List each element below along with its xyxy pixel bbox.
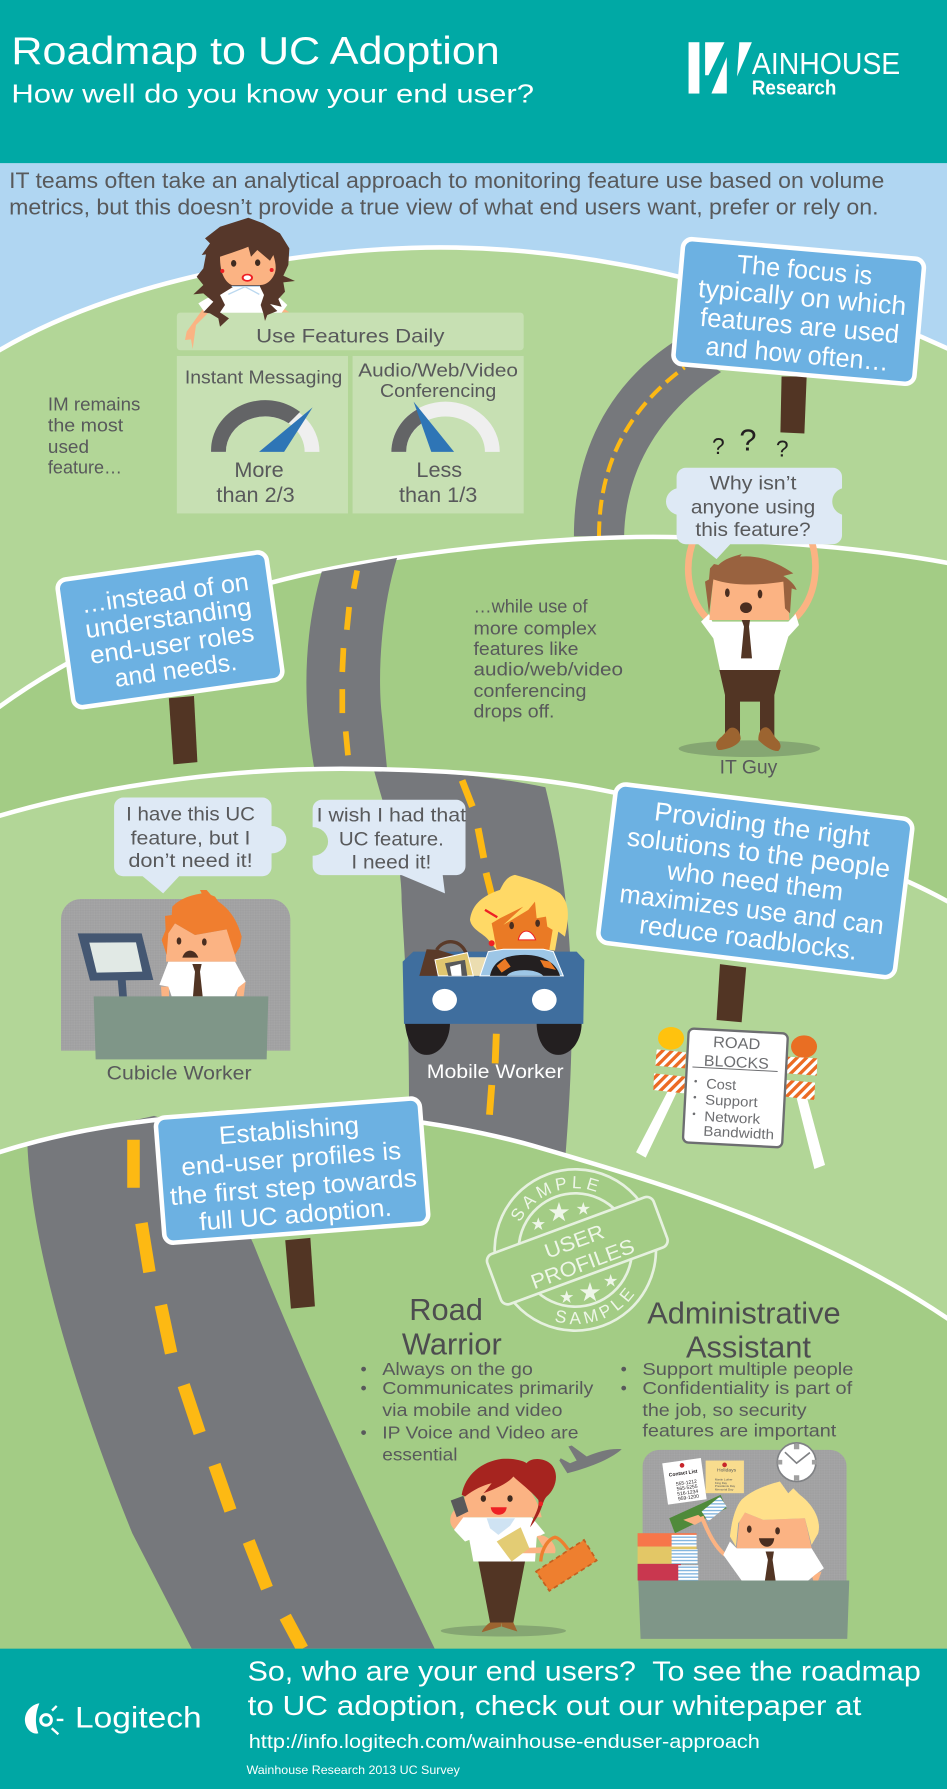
logo: Logitech: Logitech xyxy=(75,1701,202,1734)
speech bubble: have this UC feature: don’t need it! xyxy=(128,850,253,872)
gauge panel: instant messaging xyxy=(177,356,348,513)
bullets: Communicates primarily xyxy=(382,1378,593,1398)
stamp rings and sample text xyxy=(493,1168,658,1332)
monitor xyxy=(78,933,153,998)
heading xyxy=(402,1292,502,1361)
heading bar: Use Features Daily xyxy=(256,325,445,347)
bullets: • xyxy=(361,1359,367,1379)
road blocks sign board: Cost xyxy=(706,1075,737,1093)
headlights xyxy=(432,989,557,1011)
bullets: • xyxy=(621,1378,627,1398)
note: holidays: Holidays xyxy=(717,1468,737,1474)
speech bubble: why isn't anyone using: Why isn’t xyxy=(710,472,797,494)
gauge panel: instant messaging: Instant Messaging xyxy=(185,366,342,387)
heading: Administrative xyxy=(647,1295,841,1330)
subtitle: How well do you know your end user? xyxy=(11,79,534,109)
striped boards xyxy=(653,1049,817,1100)
heading: Warrior xyxy=(402,1326,502,1361)
question marks: ? xyxy=(776,435,789,461)
sign: focus on features: The focus is xyxy=(736,249,874,291)
intro text: metrics, but this doesn’t provide a true view of what end users want, prefer or rely on. xyxy=(9,194,879,219)
icon: airplane xyxy=(559,1446,622,1473)
text: while use of complex features drops off: …while use of xyxy=(474,596,589,617)
gauge panel: conferencing: Less xyxy=(416,457,462,482)
profile: administrative assistant xyxy=(621,1295,854,1440)
post: end-user roles sign xyxy=(169,696,197,764)
road blocks sign board: Network xyxy=(704,1108,762,1127)
profile: road warrior xyxy=(361,1292,593,1464)
speech bubble: why isn't anyone using: anyone using xyxy=(691,496,815,518)
road: third segment xyxy=(374,771,572,1164)
sign: right solutions: reduce roadblocks. xyxy=(638,909,859,966)
text: while use of complex features drops off: more complex xyxy=(474,617,597,638)
road blocks sign board: Support xyxy=(705,1091,758,1110)
speech bubble: why isn't anyone using: this feature? xyxy=(695,519,811,541)
speech bubble: have this UC feature: feature, but I xyxy=(131,827,250,849)
road blocks barricade xyxy=(636,1027,825,1169)
worker xyxy=(159,890,246,996)
assistant xyxy=(723,1482,824,1581)
footer URL: http://info.logitech.com/wainhouse-enduser-approach xyxy=(249,1731,760,1753)
speech bubble: have this UC feature: I have this UC xyxy=(126,803,255,825)
text: while use of complex features drops off: conferencing xyxy=(474,680,586,701)
note: contact list: 516-1234 xyxy=(677,1489,699,1498)
text: while use of complex features drops off: features like xyxy=(474,638,578,659)
speech bubble: have this UC feature xyxy=(114,798,286,893)
bullets: Support multiple people xyxy=(642,1359,854,1379)
character: road warrior woman with plane xyxy=(441,1446,622,1637)
panel: use features daily xyxy=(177,313,524,513)
sign: focus on features xyxy=(673,238,925,385)
bullets xyxy=(361,1359,593,1464)
sign: establishing user profiles: end-user profiles is xyxy=(180,1137,402,1182)
logo: Wainhouse Research: Research xyxy=(752,77,836,100)
heading xyxy=(647,1295,841,1365)
question marks: ? xyxy=(739,423,756,458)
head xyxy=(451,1459,556,1527)
warning lamps xyxy=(658,1027,817,1058)
bullets: • xyxy=(361,1378,367,1398)
speech bubble: wish I had that UC feature: I wish I had that xyxy=(317,804,467,826)
road: bottom foreground xyxy=(27,1116,435,1649)
heading: Road xyxy=(409,1292,483,1327)
note: holidays: Presidents Day xyxy=(715,1484,736,1488)
sign: end-user roles xyxy=(57,551,283,708)
note: holidays: Martin Luther xyxy=(715,1478,733,1482)
text: IM remains the most used feature xyxy=(48,394,140,477)
post: focus sign xyxy=(780,377,807,434)
banner: USER xyxy=(542,1220,607,1263)
post: user profiles sign xyxy=(285,1238,315,1309)
stamp: user profiles sample xyxy=(486,1168,669,1332)
speech bubble: wish I had that UC feature xyxy=(313,800,467,893)
cubicle wall xyxy=(643,1450,847,1581)
banner: PROFILES xyxy=(528,1235,638,1294)
stamp rings and sample text: SAMPLE xyxy=(556,1288,634,1324)
logo: Wainhouse Research: AINHOUSE xyxy=(752,46,900,81)
road blocks sign board xyxy=(683,1028,788,1147)
sign: end-user roles: end-user roles xyxy=(88,619,256,670)
text: IM remains the most used feature: used xyxy=(48,436,89,457)
bullets: IP Voice and Video are xyxy=(382,1423,579,1443)
icon: clock xyxy=(777,1443,817,1482)
note: contact list: Contact List xyxy=(669,1469,698,1479)
mobile worker in car xyxy=(403,875,584,1055)
note: contact list: 565-5255 xyxy=(676,1484,698,1493)
note: contact list xyxy=(662,1458,707,1505)
cubicle wall xyxy=(61,899,290,1051)
bullets: Always on the go xyxy=(382,1359,533,1379)
road: second segment xyxy=(306,558,397,778)
road blocks sign board: Bandwidth xyxy=(703,1123,774,1142)
hill 4 xyxy=(0,1111,947,1654)
sign: establishing user profiles: Establishing xyxy=(218,1111,360,1150)
character: IT guy xyxy=(679,537,820,757)
footer call to action xyxy=(248,1656,921,1721)
gauge panel: instant messaging: than 2/3 xyxy=(216,482,295,507)
label: Cubicle Worker: Cubicle Worker xyxy=(107,1062,252,1084)
desk xyxy=(94,996,268,1059)
post: solutions sign xyxy=(717,964,746,1022)
footer call to action: So, who are your end users? To see the roadmap xyxy=(248,1656,921,1687)
road blocks sign board: BLOCKS xyxy=(703,1053,769,1073)
driver shirt xyxy=(480,949,563,976)
note: holidays xyxy=(706,1461,744,1493)
shadow xyxy=(441,1625,566,1637)
intro text xyxy=(9,168,884,219)
title: Roadmap to UC Adoption xyxy=(11,30,500,73)
footer band xyxy=(0,1649,947,1789)
character: woman with brown hair xyxy=(185,218,295,349)
gauge panel: conferencing xyxy=(353,356,524,513)
hill 1 xyxy=(0,247,947,799)
sign: end-user roles: and needs. xyxy=(113,648,239,693)
handbag xyxy=(536,1537,597,1591)
sign: end-user roles: …instead of on xyxy=(79,568,250,619)
question marks: ? xyxy=(712,433,725,459)
text: IM remains the most used feature: the most xyxy=(48,414,123,435)
hill 4 outline xyxy=(0,1111,947,1321)
sign: right solutions: solutions to the people xyxy=(626,822,892,884)
road blocks sign board: ROAD xyxy=(713,1034,761,1054)
banner xyxy=(485,1195,670,1306)
bullets: • xyxy=(361,1423,367,1443)
stamp rings and sample text: SAMPLE xyxy=(512,1176,599,1220)
label: IT Guy: IT Guy xyxy=(720,757,778,779)
footer call to action: to UC adoption, check out our whitepaper at xyxy=(248,1690,862,1721)
angry brow, eyes, mouth, earring xyxy=(485,910,540,946)
text: while use of complex features drops off: audio/web/video xyxy=(474,658,623,679)
administrative assistant scene xyxy=(638,1443,849,1639)
sign: focus on features: typically on which xyxy=(697,273,908,321)
bullets: the job, so security xyxy=(642,1400,807,1420)
hill 2 xyxy=(0,537,947,1649)
sign: right solutions: Providing the right xyxy=(653,796,872,852)
stacks of paper xyxy=(638,1533,698,1581)
text: while use of complex features drops off: drops off. xyxy=(474,701,555,722)
desk xyxy=(638,1581,849,1639)
barricade legs xyxy=(636,1090,825,1169)
bullets: • xyxy=(621,1359,627,1379)
gauge panel: instant messaging: More xyxy=(234,457,284,482)
source note: Wainhouse Research 2013 UC Survey xyxy=(246,1763,460,1777)
note: holidays: King Day xyxy=(715,1481,728,1485)
logo: Wainhouse Research xyxy=(689,42,900,100)
label: Mobile Worker: Mobile Worker xyxy=(427,1061,564,1083)
bullets: essential xyxy=(382,1444,458,1464)
note: contact list: 959-1200 xyxy=(678,1494,700,1503)
speech bubble: wish I had that UC feature: UC feature. xyxy=(339,828,444,850)
gauge panel: conferencing: Audio/Web/Video xyxy=(358,360,518,381)
sign: right solutions: who need them xyxy=(665,855,845,907)
sign: focus on features: and how often… xyxy=(704,331,890,377)
bullets: Confidentiality is part of xyxy=(642,1378,852,1398)
hill 3 xyxy=(0,769,947,1649)
intro text: IT teams often take an analytical approach to monitoring feature use based on volume xyxy=(9,168,884,193)
bag and papers xyxy=(419,942,487,976)
question marks xyxy=(712,423,789,461)
heading bar xyxy=(177,313,524,350)
steering wheel and hands xyxy=(490,955,560,976)
gauge panel: conferencing: than 1/3 xyxy=(399,482,477,507)
bullets: features are important xyxy=(642,1420,836,1440)
stars xyxy=(532,1202,617,1303)
sign: end-user roles: understanding xyxy=(83,593,253,644)
driver hair xyxy=(470,875,568,951)
note: contact list: 555-1212 xyxy=(676,1479,698,1488)
gauge panel: conferencing: Conferencing xyxy=(380,380,496,401)
speech bubble: why isn't anyone using xyxy=(666,468,842,559)
text: IM remains the most used feature: feature… xyxy=(48,456,122,477)
legs and shoes xyxy=(478,1562,525,1632)
hill 3 outline xyxy=(0,769,947,904)
sign: establishing user profiles: the first step towards xyxy=(169,1164,418,1211)
logo: Logitech xyxy=(25,1701,202,1734)
sign: right solutions: maximizes use and can xyxy=(618,878,886,940)
car tyres xyxy=(405,1023,582,1055)
sign: establishing user profiles xyxy=(155,1098,429,1243)
sign: right solutions xyxy=(597,783,913,978)
folder and hand xyxy=(669,1495,727,1555)
note: holidays: Memorial Day xyxy=(715,1488,734,1492)
bullets: via mobile and video xyxy=(382,1400,563,1420)
speech bubble: wish I had that UC feature: I need it! xyxy=(351,851,431,873)
sign: establishing user profiles: full UC adoption. xyxy=(198,1194,393,1236)
cubicle worker scene xyxy=(61,890,290,1059)
text: IM remains the most used feature: IM remains xyxy=(48,394,140,415)
heading: Assistant xyxy=(686,1330,811,1365)
bullets xyxy=(621,1359,854,1440)
sign: focus on features: features are used xyxy=(699,302,901,349)
driver face xyxy=(492,902,553,950)
sky background xyxy=(0,163,947,551)
road: top curve xyxy=(574,342,721,536)
body xyxy=(450,1507,556,1562)
header band xyxy=(0,0,947,163)
text: while use of complex features drops off xyxy=(474,596,623,722)
car body xyxy=(403,952,584,1024)
